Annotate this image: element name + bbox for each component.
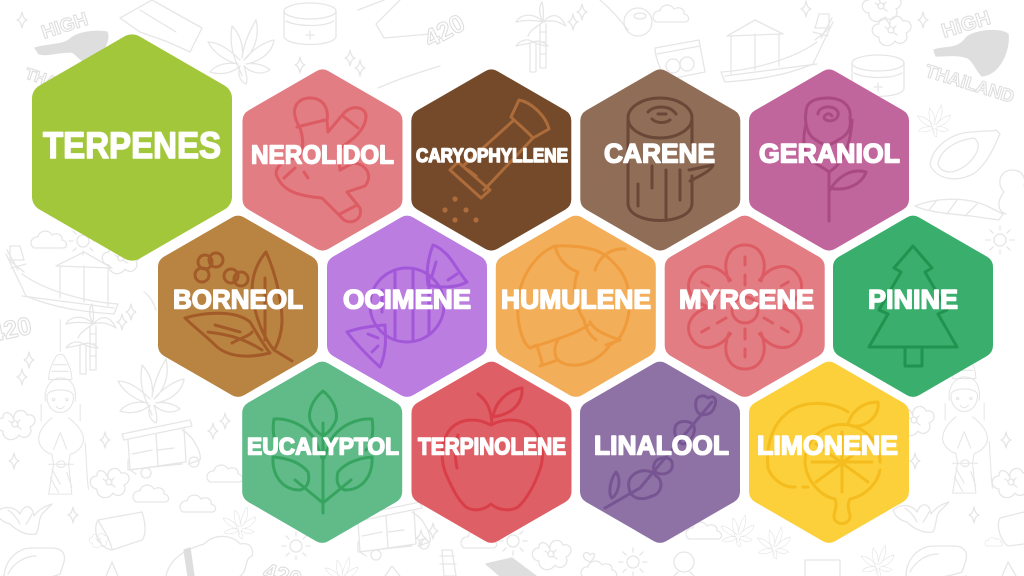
icon: apple [442,388,542,510]
icon: pepper mill [442,100,549,223]
label: CARYOPHYLLENE: CARYOPHYLLENE [416,145,568,167]
hexagon: GERANIOL [759,82,900,238]
label: BORNEOL: BORNEOL [173,284,303,314]
icon: lavender sprig [605,396,716,508]
label: TERPENES: TERPENES [43,125,221,166]
icon: lemon [768,402,880,524]
icon: ginger [276,98,369,222]
hexagon: CARYOPHYLLENE [416,82,568,238]
hexagon: LIMONENE [757,374,898,531]
hexagon: BORNEOL [170,228,306,385]
label: TERPINOLENE: TERPINOLENE [418,434,566,460]
label: PININE: PININE [868,284,958,314]
hexagon: TERPINOLENE [418,374,566,531]
background: doodle pattern: THAiLAND [923,61,1017,107]
icon: flower [682,245,808,369]
icon: candy [347,245,467,367]
icon: log [628,98,713,220]
hexagon: TERPENES [43,49,221,246]
label: LINALOOL: LINALOOL [594,430,729,460]
hexagon: OCIMENE [339,228,475,385]
hexagon: PININE [845,228,981,385]
icon: eucalyptus branch [273,391,373,513]
background: doodle pattern: THAI [23,66,64,93]
background: doodle pattern: 420 [420,9,470,53]
label: OCIMENE: OCIMENE [343,284,471,314]
background: doodle pattern: HIGH [39,9,91,44]
icon: rose [804,98,866,221]
label: EUCALYPTOL: EUCALYPTOL [247,434,399,460]
label: LIMONENE: LIMONENE [757,430,898,460]
hexagon: CARENE [592,82,728,238]
label: NEROLIDOL: NEROLIDOL [251,140,394,170]
label: GERANIOL: GERANIOL [759,138,900,168]
background: doodle pattern: HiGH [939,7,993,43]
label: CARENE: CARENE [604,138,715,168]
hexagon: HUMULENE [501,228,651,385]
hexagon: EUCALYPTOL [247,374,399,531]
icon: borneol sprig [185,252,292,361]
icon: hops [518,246,630,366]
label: MYRCENE: MYRCENE [679,284,814,314]
hexagon: NEROLIDOL [251,82,394,238]
label: HUMULENE: HUMULENE [501,284,651,314]
hexagon: LINALOOL [592,374,729,531]
hexagon: MYRCENE [677,228,814,385]
icon: pine tree [869,246,957,366]
